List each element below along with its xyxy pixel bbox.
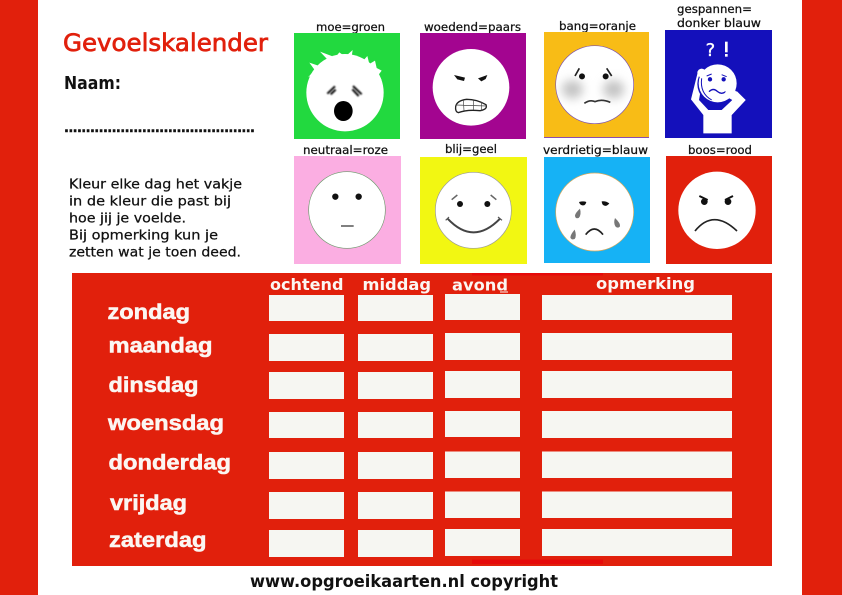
icon: angry face on red <box>666 156 772 264</box>
instructions text block: zetten wat je toen deed. <box>69 246 241 260</box>
label: gespannen=donker blauw <box>677 2 761 30</box>
icon: neutral face on pink <box>294 156 401 264</box>
instructions text block: in de kleur die past bij <box>69 194 231 210</box>
name write-in dotted line: ............................................ <box>64 121 255 136</box>
icon: tired face on green <box>294 33 400 139</box>
icon: sad crying face on light blue <box>544 157 650 263</box>
icon: stressed figure on dark blue <box>665 30 772 138</box>
title: Gevoelskalender <box>63 29 268 57</box>
day labels: woensdag <box>107 411 224 435</box>
footer copyright: www.opgroeikaarten.nl copyright <box>250 572 558 591</box>
day labels: zondag <box>108 300 190 324</box>
day labels: vrijdag <box>110 491 187 515</box>
instructions text block <box>69 178 242 260</box>
label: verdrietig=blauw: verdrietig=blauw <box>543 143 648 157</box>
day labels: zaterdag <box>109 528 206 552</box>
right red side bar <box>802 0 842 595</box>
label: gespannen=donker blauw: donker blauw <box>677 16 761 30</box>
icon: scared face on orange <box>544 32 649 138</box>
column: ochtend cells <box>269 295 344 557</box>
icon: furious face on purple <box>420 33 526 139</box>
instructions text block: Bij opmerking kun je <box>69 228 218 244</box>
day labels: donderdag <box>108 450 231 474</box>
column: middag cells <box>358 295 433 557</box>
column headers: ochtend <box>270 275 344 294</box>
label: gespannen=donker blauw: gespannen= <box>677 2 752 16</box>
left red side bar <box>0 0 38 595</box>
day labels <box>107 300 231 552</box>
instructions text block: Kleur elke dag het vakje <box>69 178 242 192</box>
name label: Naam: <box>64 74 121 94</box>
label: moe=groen: moe=groen <box>316 20 385 34</box>
instructions text block: hoe jij je voelde. <box>69 212 186 226</box>
icon: stressed figure on dark blue: ? <box>706 40 715 61</box>
label: neutraal=roze: neutraal=roze <box>303 143 388 157</box>
column: opmerking cells <box>542 295 732 556</box>
label: boos=rood: boos=rood <box>688 143 752 157</box>
day labels: dinsdag <box>108 373 198 397</box>
column headers <box>270 274 695 294</box>
label: blij=geel: blij=geel <box>445 142 497 156</box>
icon: happy face on yellow <box>420 157 527 264</box>
column headers: avond <box>452 276 508 294</box>
panel: calendar table <box>72 273 772 566</box>
column headers: middag <box>362 275 431 294</box>
label: woedend=paars: woedend=paars <box>424 20 521 34</box>
label: bang=oranje: bang=oranje <box>559 19 636 33</box>
column headers: opmerking <box>596 274 695 293</box>
column: avond cells <box>445 294 520 556</box>
day labels: maandag <box>108 334 212 358</box>
